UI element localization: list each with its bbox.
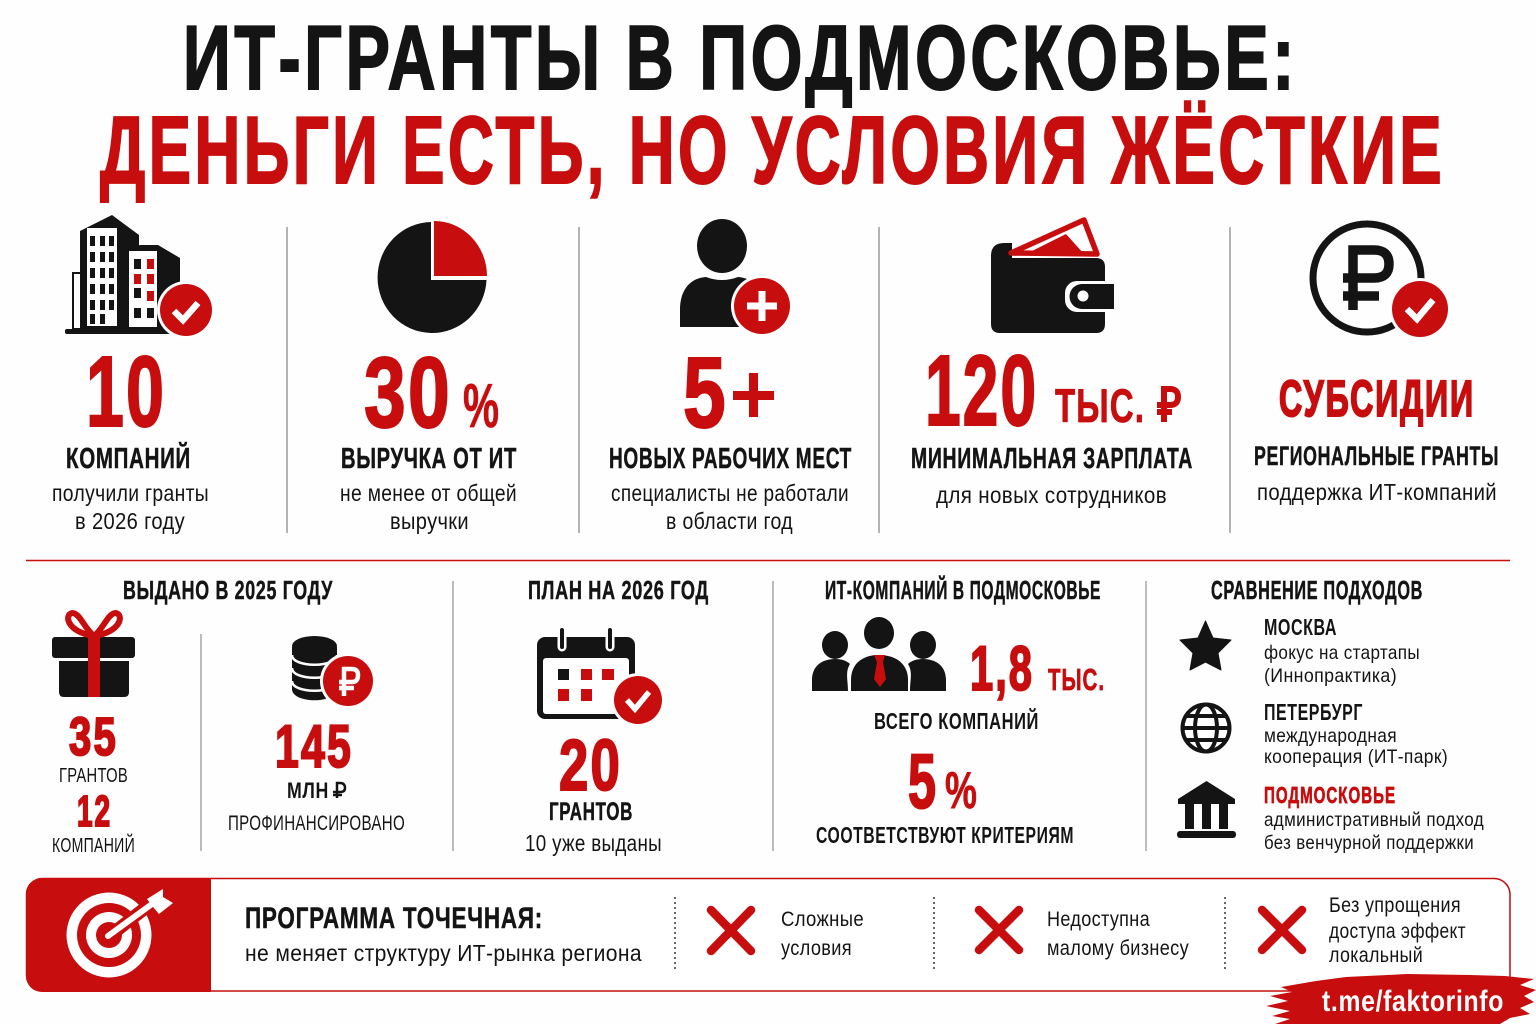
panel: 30 percent revenue bbox=[340, 221, 517, 534]
description bbox=[340, 480, 517, 534]
St Petersburg text: ПЕТЕРБУРГ bbox=[1264, 699, 1363, 725]
stat: companies: 12 bbox=[77, 787, 112, 836]
panel: minimum salary bbox=[911, 220, 1193, 508]
label: ВЫРУЧКА ОТ ИТ bbox=[341, 443, 517, 475]
icon: wallet with banknote bbox=[991, 220, 1116, 333]
title bbox=[100, 8, 1445, 204]
item: local effect: локальный bbox=[1329, 943, 1423, 967]
panel: 10 companies bbox=[52, 215, 215, 534]
item: unavailable to small business: Недоступна bbox=[1047, 907, 1150, 931]
big number: 20 bbox=[559, 726, 622, 806]
label: МИНИМАЛЬНАЯ ЗАРПЛАТА bbox=[911, 443, 1193, 475]
stat: companies: КОМПАНИЙ bbox=[52, 833, 135, 857]
icon: group of people with tie bbox=[812, 617, 946, 691]
Moscow text: (Иннопрактика) bbox=[1264, 665, 1397, 687]
big number: 5 bbox=[908, 739, 938, 825]
icon: coin stack with ruble bbox=[292, 636, 376, 709]
icon: government building bbox=[1177, 781, 1236, 838]
icon: target with arrow on red block bbox=[26, 878, 211, 992]
panel: IT companies in Moscow region bbox=[812, 575, 1105, 848]
panel: subsidies bbox=[1254, 224, 1499, 505]
Moscow text: МОСКВА bbox=[1264, 614, 1337, 640]
big number: 1,8 bbox=[970, 634, 1034, 704]
item: local effect bbox=[1262, 893, 1466, 967]
description: в 2026 году bbox=[75, 508, 185, 534]
description: не менее от общей bbox=[340, 480, 517, 506]
item: complex conditions: Сложные bbox=[781, 907, 864, 931]
icon: office buildings with check bbox=[65, 215, 215, 339]
big number: ТЫС. bbox=[1048, 662, 1105, 697]
panel: plan for 2026 bbox=[525, 575, 709, 856]
Moscow text: фокус на стартапы bbox=[1264, 642, 1420, 664]
big number: 10 bbox=[86, 336, 166, 448]
panel: targeted program banner bbox=[26, 878, 1510, 992]
big number: % bbox=[945, 762, 978, 820]
panel: issued in 2025 bbox=[52, 575, 405, 857]
icon: gift box bbox=[52, 613, 135, 697]
description: поддержка ИТ-компаний bbox=[1257, 479, 1497, 505]
panel: comparison of approaches bbox=[1177, 575, 1484, 854]
icon: ruble in circle with check bbox=[1313, 224, 1451, 340]
panel: 5+ new jobs bbox=[609, 219, 852, 534]
description: в области год bbox=[666, 508, 793, 534]
watermark: brush stroke with channel link: t.me/faktorinfo bbox=[1322, 985, 1504, 1018]
icon: person with plus bbox=[680, 219, 793, 337]
description bbox=[611, 480, 849, 534]
St Petersburg text bbox=[1264, 699, 1448, 768]
description: специалисты не работали bbox=[611, 480, 849, 506]
Moscow region text: без венчурной поддержки bbox=[1264, 832, 1474, 854]
watermark: brush stroke with channel link bbox=[1266, 974, 1536, 1024]
label: ВСЕГО КОМПАНИЙ bbox=[874, 707, 1039, 734]
big number: 5 bbox=[683, 337, 728, 449]
stat: grants bbox=[59, 707, 128, 787]
Moscow text bbox=[1264, 614, 1420, 687]
item: unavailable to small business: малому бизнесу bbox=[1047, 936, 1189, 960]
item: local effect: Без упрощения bbox=[1329, 893, 1461, 917]
big number: % bbox=[463, 372, 500, 441]
heading: ВЫДАНО В 2025 ГОДУ bbox=[123, 575, 333, 605]
big number: 30 bbox=[364, 337, 452, 449]
icon: calendar with check bbox=[537, 630, 665, 727]
stat: grants: ГРАНТОВ bbox=[59, 765, 128, 787]
label: СООТВЕТСТВУЮТ КРИТЕРИЯМ bbox=[816, 822, 1074, 848]
label: ГРАНТОВ bbox=[549, 798, 633, 826]
stat: funded amount bbox=[228, 713, 405, 835]
St Petersburg text: кооперация (ИТ-парк) bbox=[1264, 746, 1448, 768]
description: не меняет структуру ИТ-рынка региона bbox=[245, 940, 642, 966]
description: для новых сотрудников bbox=[936, 482, 1167, 508]
big number bbox=[908, 739, 978, 825]
big number bbox=[683, 337, 774, 449]
label: НОВЫХ РАБОЧИХ МЕСТ bbox=[609, 443, 852, 475]
heading: ПЛАН НА 2026 ГОД bbox=[528, 575, 709, 605]
big number bbox=[925, 335, 1178, 447]
item: local effect: доступа эффект bbox=[1329, 919, 1466, 943]
heading: ИТ-КОМПАНИЙ В ПОДМОСКОВЬЕ bbox=[825, 575, 1101, 605]
icon: pie chart bbox=[378, 221, 487, 333]
St Petersburg text: международная bbox=[1264, 725, 1397, 747]
description: получили гранты bbox=[52, 480, 209, 506]
item: unavailable to small business bbox=[979, 907, 1189, 960]
stat: grants: 35 bbox=[69, 707, 118, 767]
stat: funded amount: 145 bbox=[275, 713, 353, 780]
description: 10 уже выданы bbox=[525, 830, 662, 856]
big number: ТЫС. bbox=[1055, 379, 1145, 432]
Moscow region text: административный подход bbox=[1264, 809, 1484, 831]
item: complex conditions: условия bbox=[781, 936, 852, 960]
description: выручки bbox=[390, 508, 469, 534]
description bbox=[52, 480, 209, 534]
stat: funded amount: ПРОФИНАНСИРОВАНО bbox=[228, 812, 405, 835]
icon: star bbox=[1180, 621, 1231, 670]
item: complex conditions bbox=[711, 907, 864, 960]
label: КОМПАНИЙ bbox=[66, 441, 191, 475]
stat: funded amount: МЛН bbox=[287, 778, 329, 803]
big number: 120 bbox=[925, 335, 1038, 447]
icon: globe bbox=[1182, 704, 1230, 752]
stat: companies bbox=[52, 787, 135, 857]
heading: ПРОГРАММА ТОЧЕЧНАЯ: bbox=[245, 902, 543, 935]
Moscow region text bbox=[1264, 782, 1484, 854]
Moscow region text: ПОДМОСКОВЬЕ bbox=[1264, 782, 1396, 808]
